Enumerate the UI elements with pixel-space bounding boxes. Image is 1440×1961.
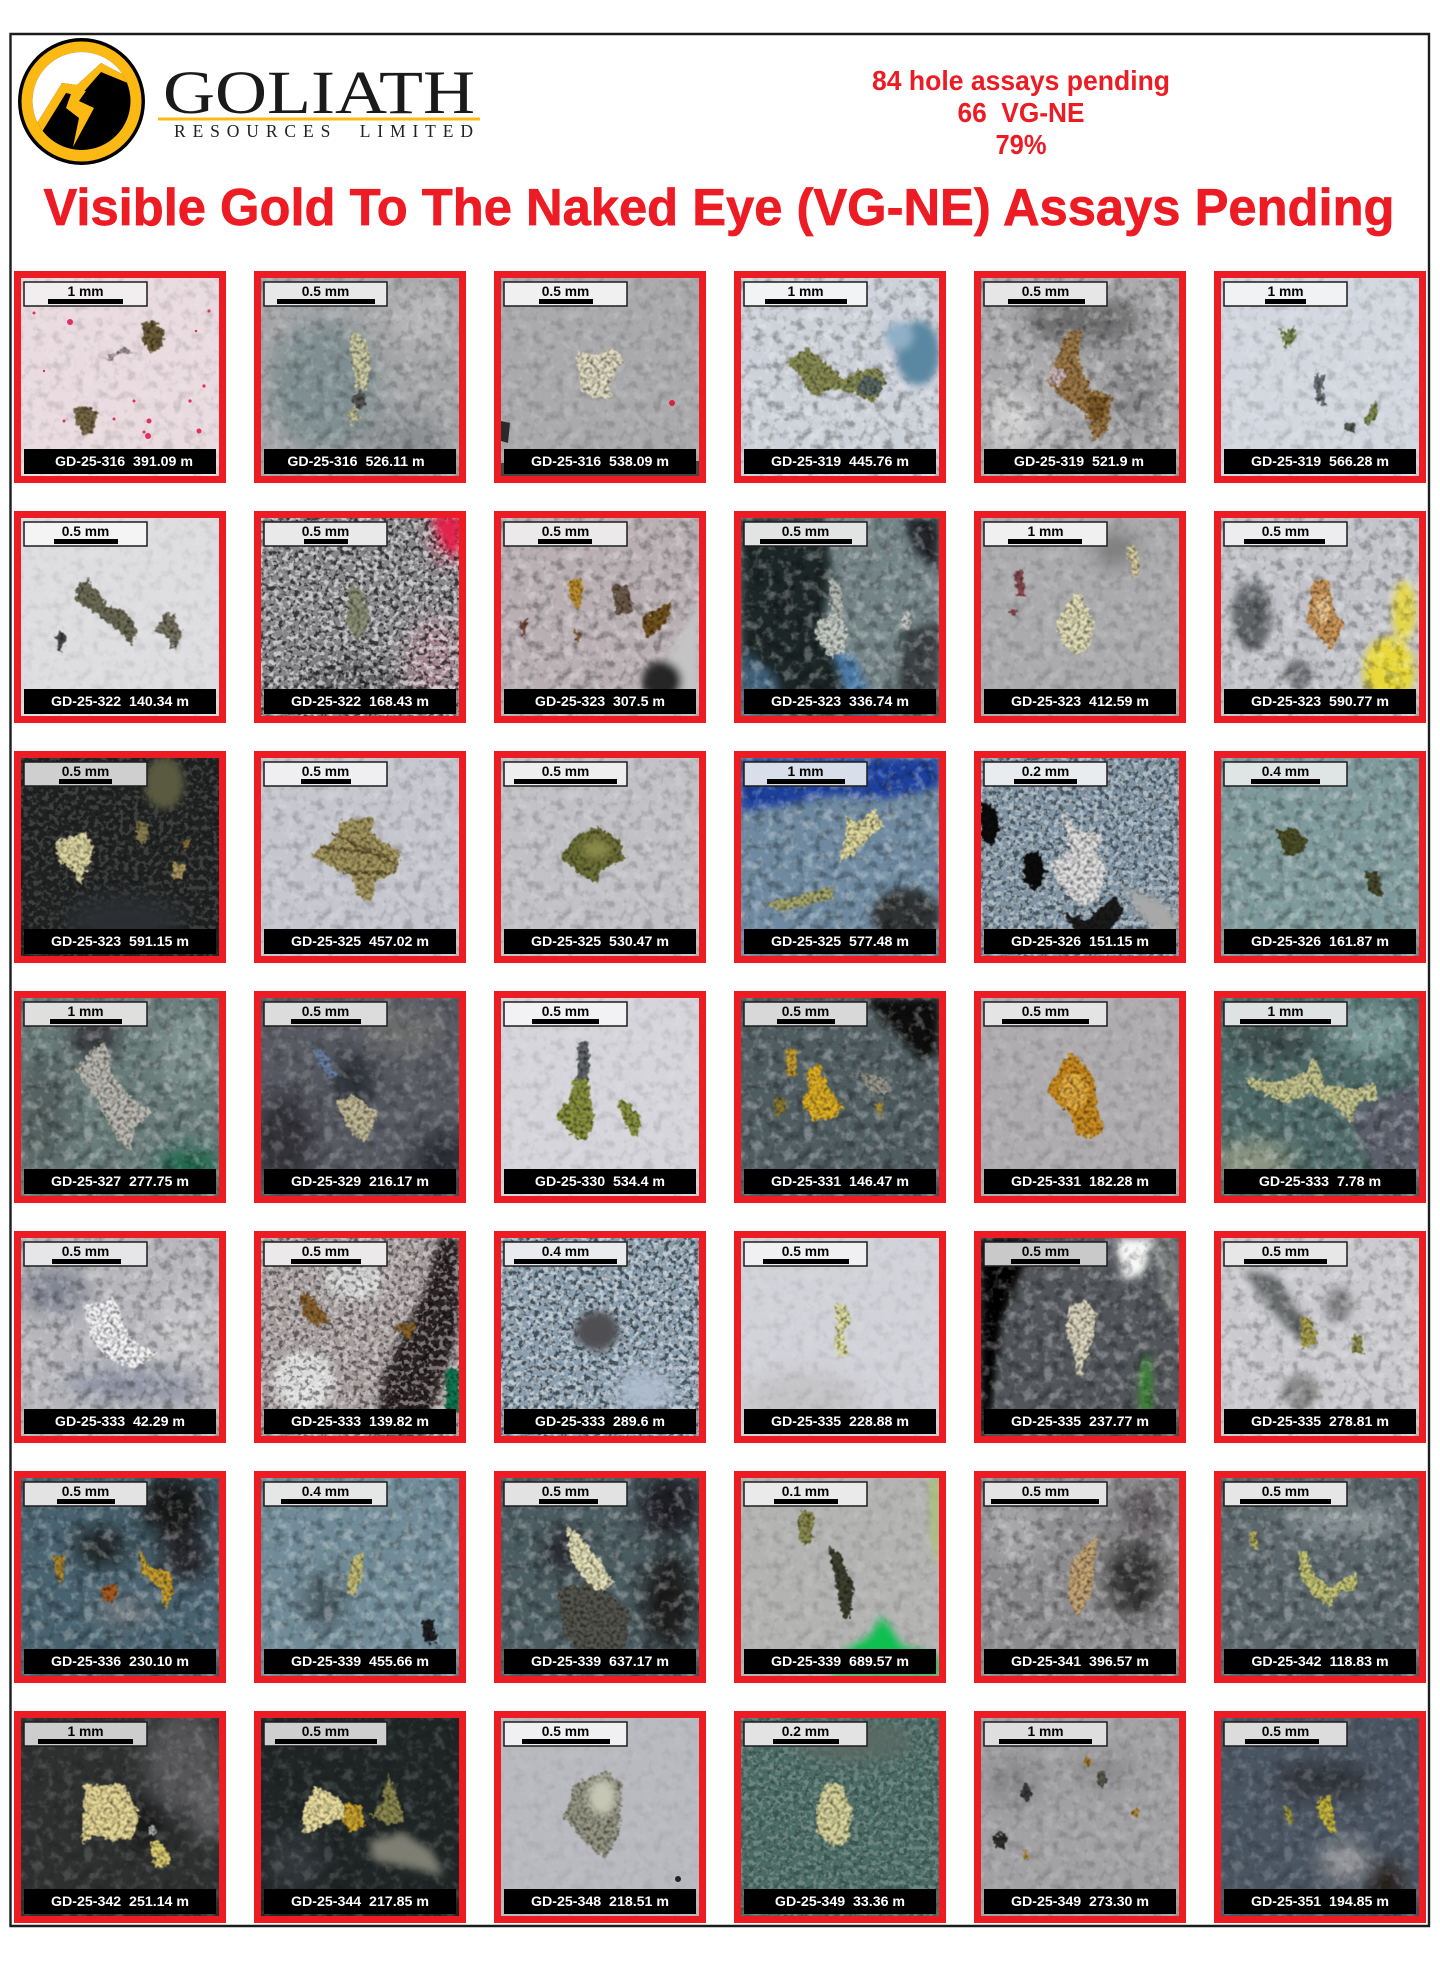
photo: pale rock with small pale flake: [741, 1238, 939, 1436]
panel: GD-25-342 118.83 m: [1214, 1471, 1426, 1683]
panel: GD-25-339 637.17 m: [494, 1471, 706, 1683]
scale bar: 1 mm: [744, 282, 867, 306]
scale bar: 0.5 mm: [24, 522, 147, 546]
caption: GD-25-330 534.4 m: [535, 1174, 665, 1190]
caption: [1224, 1409, 1416, 1434]
caption: GD-25-349 33.36 m: [775, 1894, 905, 1910]
caption: [1224, 929, 1416, 954]
caption: [264, 1649, 456, 1674]
caption: GD-25-335 228.88 m: [771, 1414, 909, 1430]
caption: GD-25-333 42.29 m: [55, 1414, 185, 1430]
scale bar: 0.5 mm: [504, 1722, 627, 1746]
caption: GD-25-319 521.9 m: [1014, 454, 1144, 470]
scale bar: 1 mm: 1 mm: [787, 284, 824, 299]
panel: GD-25-326 151.15 m: [974, 751, 1186, 963]
scale bar: 1 mm: [1224, 1002, 1347, 1026]
scale bar: 0.5 mm: [24, 1242, 147, 1266]
photo: teal-blue rock with slim gold flake: [261, 1478, 459, 1676]
caption: GD-25-342 118.83 m: [1251, 1654, 1389, 1670]
caption: GD-25-335 237.77 m: [1011, 1414, 1149, 1430]
scale bar: 0.5 mm: [264, 282, 387, 306]
summary stats text: 84 hole assays pending: [872, 65, 1170, 96]
caption: GD-25-316 391.09 m: [55, 454, 193, 470]
caption: GD-25-333 289.6 m: [535, 1414, 665, 1430]
panel: GD-25-319 445.76 m: [734, 271, 946, 483]
photo: pale grey rock with silvery flake: [501, 1718, 699, 1916]
panel: GD-25-349 273.30 m: [974, 1711, 1186, 1923]
caption: [504, 929, 696, 954]
scale bar: 0.4 mm: 0.4 mm: [542, 1244, 589, 1259]
title: Visible Gold To The Naked Eye (VG-NE) Assays Pending: [44, 178, 1394, 236]
photo: grey rock with pale elongated flake: [261, 278, 459, 476]
scale bar: 0.2 mm: [744, 1722, 867, 1746]
summary stats text: [872, 65, 1170, 160]
caption: [984, 1649, 1176, 1674]
caption: GD-25-339 637.17 m: [531, 1654, 669, 1670]
photo: pale rock with olive flake: [501, 758, 699, 956]
caption: [264, 689, 456, 714]
caption: [984, 1889, 1176, 1914]
scale bar: 0.5 mm: 0.5 mm: [1262, 1244, 1309, 1259]
logo gold rule: [158, 118, 480, 120]
caption: GD-25-326 161.87 m: [1251, 934, 1389, 950]
caption: GD-25-335 278.81 m: [1251, 1414, 1389, 1430]
panel: GD-25-341 396.57 m: [974, 1471, 1186, 1683]
photo: white and brown-black speckled rock: [261, 1238, 459, 1436]
scale bar: 0.5 mm: [1224, 522, 1347, 546]
caption: [1224, 1649, 1416, 1674]
scale bar: 0.5 mm: [744, 1242, 867, 1266]
scale bar: 0.5 mm: 0.5 mm: [782, 1244, 829, 1259]
panel: GD-25-351 194.85 m: [1214, 1711, 1426, 1923]
scale bar: 0.5 mm: [1224, 1242, 1347, 1266]
panel: GD-25-333 139.82 m: [254, 1231, 466, 1443]
caption: [984, 929, 1176, 954]
caption: [744, 1409, 936, 1434]
scale bar: 0.1 mm: 0.1 mm: [782, 1484, 829, 1499]
panel: GD-25-316 526.11 m: [254, 271, 466, 483]
scale bar: 0.5 mm: [264, 522, 387, 546]
panel: GD-25-342 251.14 m: [14, 1711, 226, 1923]
photo: teal rock with pale gold streak: [1214, 998, 1419, 1196]
scale bar: 1 mm: 1 mm: [1267, 284, 1304, 299]
photo: speckled dark rock with pink stain and pale flake: [261, 518, 459, 716]
scale bar: 1 mm: [1224, 282, 1347, 306]
photo: grey rock with dark patch and tan flake: [981, 1478, 1179, 1676]
scale bar: 0.5 mm: [984, 1242, 1107, 1266]
scale bar: 0.5 mm: [264, 1002, 387, 1026]
photo: dark rock with bright pale flake and metallic speckle: [501, 1474, 699, 1676]
panel: GD-25-323 591.15 m: [14, 751, 226, 963]
panel: GD-25-331 146.47 m: [734, 991, 946, 1203]
panel: GD-25-344 217.85 m: [254, 1711, 466, 1923]
scale bar: 0.5 mm: [504, 1482, 627, 1506]
caption: [504, 1649, 696, 1674]
caption: GD-25-351 194.85 m: [1251, 1894, 1389, 1910]
scale bar: 0.5 mm: 0.5 mm: [542, 1484, 589, 1499]
scale bar: 0.5 mm: 0.5 mm: [782, 524, 829, 539]
panel: GD-25-323 307.5 m: [494, 511, 706, 723]
icon: gold ring with mountain and lightning bolt: [18, 30, 145, 165]
caption: GD-25-319 566.28 m: [1251, 454, 1389, 470]
caption: GD-25-326 151.15 m: [1011, 934, 1149, 950]
wordmark: GOLIATH: GOLIATH: [163, 60, 475, 127]
caption: [264, 1409, 456, 1434]
scale bar: 0.5 mm: [24, 1482, 147, 1506]
panel: GD-25-322 168.43 m: [254, 501, 466, 723]
panel: GD-25-319 521.9 m: [974, 271, 1186, 483]
panel: GD-25-323 590.77 m: [1214, 511, 1426, 723]
caption: [24, 1649, 216, 1674]
scale bar: 0.5 mm: 0.5 mm: [302, 284, 349, 299]
caption: GD-25-323 307.5 m: [535, 694, 665, 710]
scale bar: 0.4 mm: [1224, 762, 1347, 786]
scale bar: 0.5 mm: 0.5 mm: [62, 764, 109, 779]
caption: GD-25-336 230.10 m: [51, 1654, 189, 1670]
caption: GD-25-323 336.74 m: [771, 694, 909, 710]
caption: [24, 1169, 216, 1194]
scale bar: 1 mm: 1 mm: [1027, 1724, 1064, 1739]
scale bar: 0.4 mm: [264, 1482, 387, 1506]
scale bar: 0.2 mm: 0.2 mm: [782, 1724, 829, 1739]
photo: speckled blue-white rock with dark centre: [501, 1238, 699, 1436]
caption: [504, 1169, 696, 1194]
scale bar: 1 mm: [24, 1722, 147, 1746]
caption: GD-25-331 182.28 m: [1011, 1174, 1149, 1190]
panel: GD-25-323 336.74 m: [734, 511, 946, 723]
photo: speckled blue-grey rock with white flake: [981, 758, 1179, 956]
summary stats text: 79%: [996, 129, 1047, 160]
panel: GD-25-339 455.66 m: [254, 1471, 466, 1683]
panel: GD-25-339 689.57 m: [734, 1471, 946, 1683]
caption: [1224, 1169, 1416, 1194]
caption: [24, 1409, 216, 1434]
summary stats text: 66 VG-NE: [958, 97, 1084, 128]
photo: dark blue-grey rock with gold flake: [1221, 1718, 1419, 1916]
scale bar: 1 mm: 1 mm: [67, 1724, 104, 1739]
caption: GD-25-316 526.11 m: [287, 454, 425, 470]
caption: [744, 1169, 936, 1194]
scale bar: 0.5 mm: [504, 282, 627, 306]
photo: dark rock with pale gold nugget: [21, 1711, 224, 1916]
scale bar: 0.5 mm: [504, 1002, 627, 1026]
caption: [744, 929, 936, 954]
scale bar: 0.5 mm: 0.5 mm: [542, 1004, 589, 1019]
panel: GD-25-325 457.02 m: [254, 751, 466, 963]
caption: [264, 1889, 456, 1914]
photo: grey rock with small gold and dark specks: [981, 1718, 1179, 1916]
caption: GD-25-325 577.48 m: [771, 934, 909, 950]
photo: white rock with blue stain and green-gold flake: [741, 278, 940, 476]
panel: GD-25-335 237.77 m: [974, 1231, 1186, 1443]
scale bar: 0.1 mm: [744, 1482, 867, 1506]
wordmark: RESOURCES LIMITED: RESOURCES LIMITED: [174, 121, 473, 141]
caption: [504, 449, 696, 474]
caption: [24, 689, 216, 714]
scale bar: 0.5 mm: [264, 762, 387, 786]
scale bar: 1 mm: [744, 762, 867, 786]
scale bar: 0.5 mm: [984, 282, 1107, 306]
scale bar: 1 mm: [984, 522, 1107, 546]
panel: GD-25-330 534.4 m: [494, 991, 706, 1203]
caption: GD-25-319 445.76 m: [771, 454, 909, 470]
scale bar: 0.5 mm: 0.5 mm: [302, 764, 349, 779]
scale bar: 0.5 mm: 0.5 mm: [1262, 1484, 1309, 1499]
caption: GD-25-327 277.75 m: [51, 1174, 189, 1190]
caption: GD-25-323 412.59 m: [1011, 694, 1149, 710]
panel: GD-25-333 7.78 m: [1214, 991, 1426, 1203]
scale bar: 1 mm: 1 mm: [67, 284, 104, 299]
caption: [504, 1889, 696, 1914]
panel: GD-25-336 230.10 m: [14, 1471, 226, 1683]
scale bar: 0.5 mm: 0.5 mm: [1022, 1484, 1069, 1499]
caption: GD-25-322 168.43 m: [291, 694, 429, 710]
panel: GD-25-333 289.6 m: [494, 1231, 706, 1443]
photo: green-grey rock with pale yellow flake: [741, 1718, 939, 1916]
photo: pale rock with small scattered flakes: [1221, 278, 1419, 476]
panel: GD-25-325 577.48 m: [734, 751, 946, 963]
scale bar: 0.5 mm: 0.5 mm: [302, 1724, 349, 1739]
photo: mottled grey rock with white flake: [20, 1238, 219, 1436]
panel: GD-25-348 218.51 m: [494, 1711, 706, 1923]
panel: GD-25-316 391.09 m: [14, 271, 226, 483]
scale bar: 0.5 mm: 0.5 mm: [62, 524, 109, 539]
caption: [264, 449, 456, 474]
scale bar: 0.5 mm: 0.5 mm: [542, 764, 589, 779]
photo: white rock with green-gold flakes: [501, 998, 699, 1196]
scale bar: 0.5 mm: [504, 522, 627, 546]
scale bar: 0.5 mm: [744, 1002, 867, 1026]
panel: GD-25-349 33.36 m: [734, 1711, 946, 1923]
scale bar: 0.5 mm: [1224, 1482, 1347, 1506]
scale bar: 0.4 mm: 0.4 mm: [302, 1484, 349, 1499]
scale bar: 0.4 mm: [504, 1242, 627, 1266]
caption: GD-25-333 7.78 m: [1259, 1174, 1381, 1190]
caption: GD-25-325 530.47 m: [531, 934, 669, 950]
caption: GD-25-331 146.47 m: [771, 1174, 909, 1190]
caption: [264, 929, 456, 954]
panel: GD-25-327 277.75 m: [14, 991, 226, 1203]
panel: GD-25-322 140.34 m: [14, 511, 226, 723]
scale bar: 0.5 mm: [24, 762, 147, 786]
photo: dark slate rock with bright gold flakes: [741, 998, 939, 1196]
caption: GD-25-339 689.57 m: [771, 1654, 909, 1670]
panel: GD-25-335 228.88 m: [734, 1231, 946, 1443]
scale bar: 0.5 mm: 0.5 mm: [302, 1244, 349, 1259]
scale bar: 0.5 mm: 0.5 mm: [542, 284, 589, 299]
photo: dark blue-grey rock with gold streaks: [21, 1474, 219, 1676]
scale bar: 1 mm: 1 mm: [67, 1004, 104, 1019]
photo: dark grey rock with blue streak and pale flake: [254, 998, 474, 1196]
scale bar: 0.5 mm: 0.5 mm: [302, 1004, 349, 1019]
caption: [744, 689, 936, 714]
photo: dark rock with grey patch and blue streak: [741, 518, 939, 716]
scale bar: 1 mm: 1 mm: [1267, 1004, 1304, 1019]
photo: blue-grey rock with blue stain and pale flake: [741, 758, 940, 956]
photo: teal rock with dark olive flakes: [1221, 758, 1419, 956]
scale bar: 0.5 mm: 0.5 mm: [542, 524, 589, 539]
scale bar: 0.5 mm: 0.5 mm: [1262, 524, 1309, 539]
scale bar: 0.5 mm: [984, 1002, 1107, 1026]
panel: GD-25-331 182.28 m: [974, 991, 1186, 1203]
scale bar: 0.5 mm: 0.5 mm: [542, 1724, 589, 1739]
photo: pink stained rock with two gold flakes: [21, 278, 219, 476]
photo: black rock with pale gold flakes: [21, 757, 219, 956]
photo: pale rock with striped gold flake: [261, 758, 459, 956]
caption: [984, 689, 1176, 714]
scale bar: 0.5 mm: [984, 1482, 1107, 1506]
caption: [1224, 689, 1416, 714]
scale bar: 0.5 mm: 0.5 mm: [1022, 1004, 1069, 1019]
caption: [744, 1649, 936, 1674]
scale bar: 0.5 mm: [504, 762, 627, 786]
scale bar: 0.5 mm: 0.5 mm: [62, 1244, 109, 1259]
caption: GD-25-339 455.66 m: [291, 1654, 429, 1670]
photo: grey rock with orange flake and yellow stain: [1221, 518, 1419, 716]
scale bar: 0.5 mm: 0.5 mm: [1022, 1244, 1069, 1259]
caption: GD-25-348 218.51 m: [531, 1894, 669, 1910]
photo: mottled grey rock with orange-brown flakes: [981, 278, 1179, 476]
caption: [504, 689, 696, 714]
caption: [504, 1409, 696, 1434]
photo: white rock with olive flakes: [21, 518, 219, 716]
caption: [984, 1169, 1176, 1194]
photo: dark rock with pale and deep gold flakes: [261, 1718, 459, 1916]
photo: slate rock with yellow flake: [1221, 1478, 1419, 1676]
logo: Goliath Resources Limited: [18, 30, 480, 165]
scale bar: 0.5 mm: [264, 1722, 387, 1746]
caption: [1224, 449, 1416, 474]
scale bar: 0.5 mm: 0.5 mm: [1262, 1724, 1309, 1739]
scale bar: 1 mm: 1 mm: [1027, 524, 1064, 539]
scale bar: 0.5 mm: [744, 522, 867, 546]
caption: GD-25-323 590.77 m: [1251, 694, 1389, 710]
caption: GD-25-342 251.14 m: [51, 1894, 189, 1910]
panel: GD-25-316 538.09 m: [494, 271, 706, 483]
caption: GD-25-322 140.34 m: [51, 694, 189, 710]
scale bar: 0.5 mm: 0.5 mm: [782, 1004, 829, 1019]
caption: [984, 449, 1176, 474]
scale bar: 0.5 mm: 0.5 mm: [1022, 284, 1069, 299]
panel: GD-25-335 278.81 m: [1214, 1231, 1426, 1443]
caption: GD-25-329 216.17 m: [291, 1174, 429, 1190]
photo: grey rock with pale gold flake: [501, 278, 699, 476]
photo: grey-green rock with pale ribbed flake: [20, 998, 221, 1196]
scale bar: 1 mm: [24, 1002, 147, 1026]
panel: GD-25-329 216.17 m: [254, 991, 474, 1203]
caption: GD-25-344 217.85 m: [291, 1894, 429, 1910]
caption: [984, 1409, 1176, 1434]
photo: dark rock with bright glare and pale flake: [981, 1238, 1179, 1436]
caption: GD-25-341 396.57 m: [1011, 1654, 1149, 1670]
caption: [744, 1889, 936, 1914]
photo: pink-grey rock with brown and orange flakes: [501, 518, 699, 716]
panel: GD-25-326 161.87 m: [1214, 751, 1426, 963]
panel: GD-25-319 566.28 m: [1214, 271, 1426, 483]
scale bar: 1 mm: [24, 282, 147, 306]
photo: grey rock with ribbed pale gold flake: [981, 518, 1179, 716]
scale bar: 0.5 mm: 0.5 mm: [62, 1484, 109, 1499]
caption: GD-25-333 139.82 m: [291, 1414, 429, 1430]
scale bar: 0.2 mm: [984, 762, 1107, 786]
scale bar: 1 mm: [984, 1722, 1107, 1746]
caption: [264, 1169, 456, 1194]
caption: [1224, 1889, 1416, 1914]
scale bar: 0.5 mm: [264, 1242, 387, 1266]
caption: GD-25-325 457.02 m: [291, 934, 429, 950]
caption: [24, 1889, 216, 1914]
photo: grey rock with dark slim flake and bright green stain: [741, 1478, 939, 1676]
caption: [24, 929, 216, 954]
scale bar: 0.4 mm: 0.4 mm: [1262, 764, 1309, 779]
scale bar: 0.5 mm: 0.5 mm: [302, 524, 349, 539]
scale bar: 0.5 mm: [1224, 1722, 1347, 1746]
photo: white rock with dark vein and gold flake: [1221, 1238, 1419, 1436]
scale bar: 1 mm: 1 mm: [787, 764, 824, 779]
caption: GD-25-316 538.09 m: [531, 454, 669, 470]
panel: GD-25-325 530.47 m: [494, 751, 706, 963]
photo: grey rock with gold nugget: [981, 998, 1179, 1196]
caption: GD-25-323 591.15 m: [51, 934, 189, 950]
caption: [24, 449, 216, 474]
caption: [744, 449, 936, 474]
panel: GD-25-323 412.59 m: [974, 511, 1186, 723]
scale bar: 0.2 mm: 0.2 mm: [1022, 764, 1069, 779]
caption: GD-25-349 273.30 m: [1011, 1894, 1149, 1910]
panel: GD-25-333 42.29 m: [14, 1231, 226, 1443]
